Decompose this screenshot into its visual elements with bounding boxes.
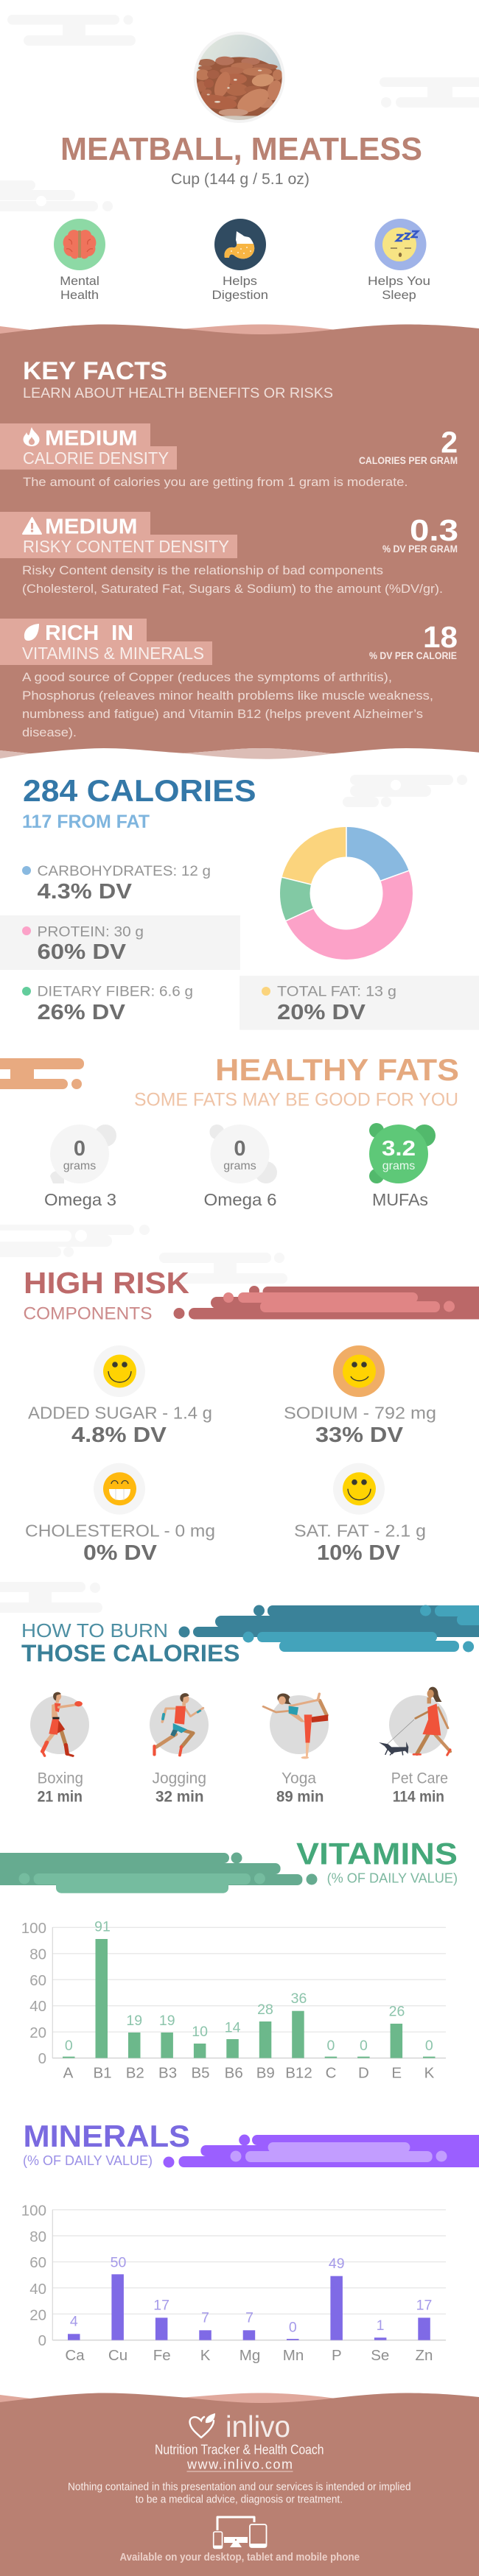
bar chart: vitamins: 0 [425,2038,433,2054]
bar chart: vitamins: 0 [65,2038,73,2054]
icon: boxer [43,1692,83,1756]
bar chart: minerals: Mn [283,2347,304,2364]
footer tagline: Nutrition Tracker & Health Coach [155,2443,324,2457]
bar chart: vitamins: 60 [29,1972,46,1989]
risk: cholesterol [25,1463,215,1565]
fact: risky content density: % DV PER GRAM [382,543,458,555]
panel: footer background [0,2393,479,2576]
fact: risky content density: MEDIUM [45,515,137,539]
activity: boxing: 21 min [38,1789,83,1806]
icon: leaf [24,624,39,641]
legend: total fat: TOTAL FAT: 13 g [277,984,396,1000]
decorative bars: minerals [164,2134,479,2168]
activity: pet care: 114 min [393,1789,444,1806]
fact: risky content density: RISKY CONTENT DENSITY [23,537,229,556]
calories heading: 117 FROM FAT [22,812,150,832]
legend: protein: 60% DV [37,940,127,964]
bar chart: vitamins: 19 [126,2013,142,2029]
fact: calorie density: MEDIUM [45,427,137,451]
bar chart: minerals: 0 [289,2320,297,2336]
bar chart: minerals: Mg [240,2347,260,2364]
food photo: beans [192,29,287,125]
activity: jogging: Jogging [152,1770,206,1787]
calories heading: 284 CALORIES [23,773,256,808]
disclaimer [68,2482,411,2506]
fat: omega 3: grams [63,1160,96,1172]
bar chart: vitamins: 91 [94,1919,111,1935]
fact: calorie density: CALORIE DENSITY [23,448,169,468]
chart: macronutrient donut [282,826,410,945]
bar chart: minerals: 7 [245,2309,254,2326]
bar chart: vitamins: B1 [93,2065,112,2082]
activity: pet care [379,1687,450,1806]
bar chart: minerals: 50 [111,2254,126,2270]
activity: jogging [150,1693,209,1806]
bar chart: vitamins: 80 [29,1946,46,1963]
activity: boxing: Boxing [38,1770,83,1787]
bar chart: minerals: 20 [29,2307,46,2324]
fact: calorie density [0,423,458,489]
bar chart: vitamins: D [358,2065,369,2082]
vitamins heading: VITAMINS [296,1837,458,1871]
fat: MUFAs: 3.2 [382,1137,416,1161]
bar chart: vitamins: 28 [257,2002,273,2018]
availability note: Available on your desktop, tablet and mobile phone [119,2551,360,2563]
healthy fats heading: HEALTHY FATS [215,1052,459,1087]
fact: risky content density: 0.3 [410,513,458,547]
risk: sodium [284,1345,436,1447]
bar chart: vitamins: 0 [38,2050,46,2067]
minerals heading: (% OF DAILY VALUE) [23,2153,153,2168]
bar chart: minerals: K [200,2347,211,2364]
minerals heading: MINERALS [24,2119,190,2153]
bar chart: vitamins: 100 [21,1920,46,1937]
decorative bars: vitamins [0,1853,317,1893]
fat: omega 3: Omega 3 [44,1190,116,1209]
bar chart: minerals: 1 [377,2318,385,2334]
decorative bars: healthy fats [0,1058,84,1089]
bar chart: minerals: 4 [70,2313,78,2329]
high risk heading: COMPONENTS [24,1304,152,1324]
bar chart: vitamins: 10 [192,2024,208,2040]
bar chart: minerals: Zn [416,2347,433,2364]
icon: smiley [103,1355,136,1387]
bar chart: minerals: 40 [29,2281,46,2298]
fact: risky content density [0,512,458,596]
benefit: mental health: Health [60,288,99,302]
decorative bars: high risk [174,1286,479,1320]
icon: flame [24,427,40,446]
fat: MUFAs: MUFAs [372,1190,428,1209]
fat: omega 6 [203,1125,277,1209]
fat: MUFAs [369,1123,436,1209]
activity: boxing [30,1692,89,1806]
bar chart: vitamins: 40 [29,1998,46,2015]
fact: rich in vitamins and minerals: numbness and fatigue) and Vitamin B12 (helps prevent Alzheimer’s [22,708,423,721]
activity: yoga: Yoga [282,1770,316,1787]
risk: added sugar [28,1345,212,1447]
risk: saturated fat: SAT. FAT - 2.1 g [294,1521,426,1541]
legend: total fat: 20% DV [277,1001,366,1024]
fact: calorie density: The amount of calories you are getting from 1 gram is moderate. [23,476,408,489]
fat: omega 6: 0 [234,1137,246,1161]
bar chart: minerals: P [332,2347,342,2364]
bar chart: minerals: 0 [38,2332,46,2349]
risk: sodium: SODIUM - 792 mg [284,1404,436,1423]
bar chart: minerals: Cu [108,2347,127,2364]
burn heading: THOSE CALORIES [21,1640,240,1667]
bar chart: vitamins: B12 [285,2065,312,2082]
icon: desktop, tablet and phone [214,2517,267,2548]
decorative bars: burn calories [178,1605,479,1653]
icon: brain [63,230,96,258]
healthy fats heading: SOME FATS MAY BE GOOD FOR YOU [134,1091,458,1111]
fact: risky content density: Risky Content density is the relationship of bad components [22,564,383,577]
footer url: www.inlivo.com [186,2457,293,2472]
risk: sodium: 33% DV [315,1424,404,1447]
fact: rich in vitamins and minerals [0,619,458,739]
bar chart: vitamins: E [391,2065,402,2082]
disclaimer: Nothing contained in this presentation and our services is intended or implied [68,2482,411,2494]
key facts heading: KEY FACTS [23,357,167,385]
bar chart: vitamins: 20 [29,2024,46,2041]
benefit: digestion [212,219,268,302]
benefit: sleep: Helps You [368,274,430,288]
bar chart: vitamins: 36 [291,1991,307,2007]
icon: grinning face [103,1472,136,1505]
fact: risky content density: (Cholesterol, Saturated Fat, Sugars & Sodium) to the amount (%DV/gr). [22,583,443,596]
fact: calorie density: 2 [441,426,458,460]
logo: inlivo heart and leaf: inlivo [225,2410,290,2443]
fat: omega 6: grams [223,1160,256,1172]
activity: yoga [263,1694,329,1806]
risk: cholesterol: 0% DV [83,1541,158,1565]
fact: rich in vitamins and minerals: A good source of Copper (reduces the symptoms of arthritis), [22,671,392,684]
bar chart: vitamins [21,1919,446,2082]
icon: sleeping face [382,228,418,261]
bar chart: vitamins: B2 [126,2065,144,2082]
risk: saturated fat [294,1463,426,1565]
activity: pet care: Pet Care [391,1770,448,1787]
bar chart: vitamins: A [63,2065,74,2082]
bar chart: minerals: 80 [29,2228,46,2245]
title: MEATBALL, MEATLESS [60,131,422,167]
bar chart: vitamins: 0 [360,2038,368,2054]
benefit: sleep [368,219,430,302]
burn heading: HOW TO BURN [21,1621,168,1641]
fact: rich in vitamins and minerals: RICH IN [45,622,133,645]
burn heading [21,1621,240,1667]
bar chart: vitamins: B6 [225,2065,243,2082]
risk: added sugar: ADDED SUGAR - 1.4 g [28,1404,212,1423]
bar chart: minerals: Ca [65,2347,85,2364]
minerals heading [23,2119,190,2168]
icon: stomach [225,231,254,258]
risk: saturated fat: 10% DV [317,1541,401,1565]
benefit: mental health [54,219,105,302]
bar chart: minerals: 17 [416,2298,432,2314]
background clouds: high risk [0,1225,287,1284]
key facts heading [23,357,333,401]
bar chart: minerals: 17 [153,2298,169,2314]
legend: protein [0,915,240,970]
bar chart: vitamins: 26 [389,2004,405,2020]
bar chart: vitamins: 19 [159,2013,175,2029]
vitamins heading: (% OF DAILY VALUE) [327,1871,458,1886]
bar chart: minerals: 7 [201,2309,209,2326]
high risk heading [24,1266,189,1324]
legend: dietary fiber [22,984,193,1024]
icon: jogger [154,1693,203,1756]
vitamins heading [296,1837,458,1886]
legend: dietary fiber: DIETARY FIBER: 6.6 g [37,984,193,1000]
bar chart: minerals: 60 [29,2254,46,2271]
bar chart: vitamins: B5 [191,2065,210,2082]
calories heading [22,773,256,832]
bar chart: minerals: Se [371,2347,389,2364]
serving size: Cup (144 g / 5.1 oz) [171,171,310,188]
fat: omega 3 [44,1125,116,1209]
logo: inlivo heart and leaf [190,2410,290,2443]
bar chart: vitamins: 14 [225,2019,241,2035]
fat: MUFAs: grams [382,1160,415,1172]
high risk heading: HIGH RISK [24,1266,189,1300]
background clouds: header [0,15,479,211]
fat: omega 3: 0 [74,1137,85,1161]
icon: woman walking dog [379,1687,450,1755]
legend: carbohydrates [22,863,211,904]
fact: rich in vitamins and minerals: Phosphorus (releaves minor health problems like muscle weakness, [22,689,433,703]
fact: rich in vitamins and minerals: 18 [423,620,458,654]
background cloud: calories [343,775,467,807]
background cloud: burn [0,1582,102,1613]
activity: jogging: 32 min [155,1789,203,1806]
bar chart: minerals: 49 [329,2256,345,2272]
fact: calorie density: CALORIES PER GRAM [359,455,458,466]
bar chart: minerals: 100 [21,2202,46,2219]
fact: rich in vitamins and minerals: % DV PER CALORIE [369,650,457,661]
benefit: sleep: Sleep [382,288,416,302]
disclaimer: to be a medical advice, diagnosis or treatment. [136,2494,343,2506]
risk: cholesterol: CHOLESTEROL - 0 mg [25,1521,215,1541]
key facts heading: LEARN ABOUT HEALTH BENEFITS OR RISKS [23,385,333,401]
legend: dietary fiber: 26% DV [37,1001,126,1024]
icon: smiley face [343,1472,376,1505]
bar chart: vitamins: C [326,2065,337,2082]
benefit: digestion: Helps [223,274,257,288]
bar chart: vitamins: B3 [158,2065,177,2082]
legend: carbohydrates: 4.3% DV [37,880,133,904]
legend: carbohydrates: CARBOHYDRATES: 12 g [37,863,211,879]
legend: total fat [240,976,479,1030]
fact: rich in vitamins and minerals: VITAMINS & MINERALS [22,644,204,663]
fact: rich in vitamins and minerals: disease). [22,726,77,739]
fat: omega 6: Omega 6 [203,1190,277,1209]
icon: yoga pose [263,1694,328,1759]
risk: added sugar: 4.8% DV [71,1424,167,1447]
benefit: mental health: Mental [60,274,99,288]
bar chart: vitamins: B9 [256,2065,275,2082]
bar chart: vitamins: 0 [326,2038,335,2054]
legend: protein: PROTEIN: 30 g [37,924,144,940]
panel: key facts background [0,324,479,759]
healthy fats heading [134,1052,459,1111]
bar chart: vitamins: K [424,2065,435,2082]
bar chart: minerals [21,2202,446,2364]
icon: warning triangle [23,518,41,534]
activity: yoga: 89 min [276,1789,324,1806]
bar chart: minerals: Fe [153,2347,171,2364]
icon: smiley small smile [343,1355,376,1387]
benefit: digestion: Digestion [212,288,268,302]
